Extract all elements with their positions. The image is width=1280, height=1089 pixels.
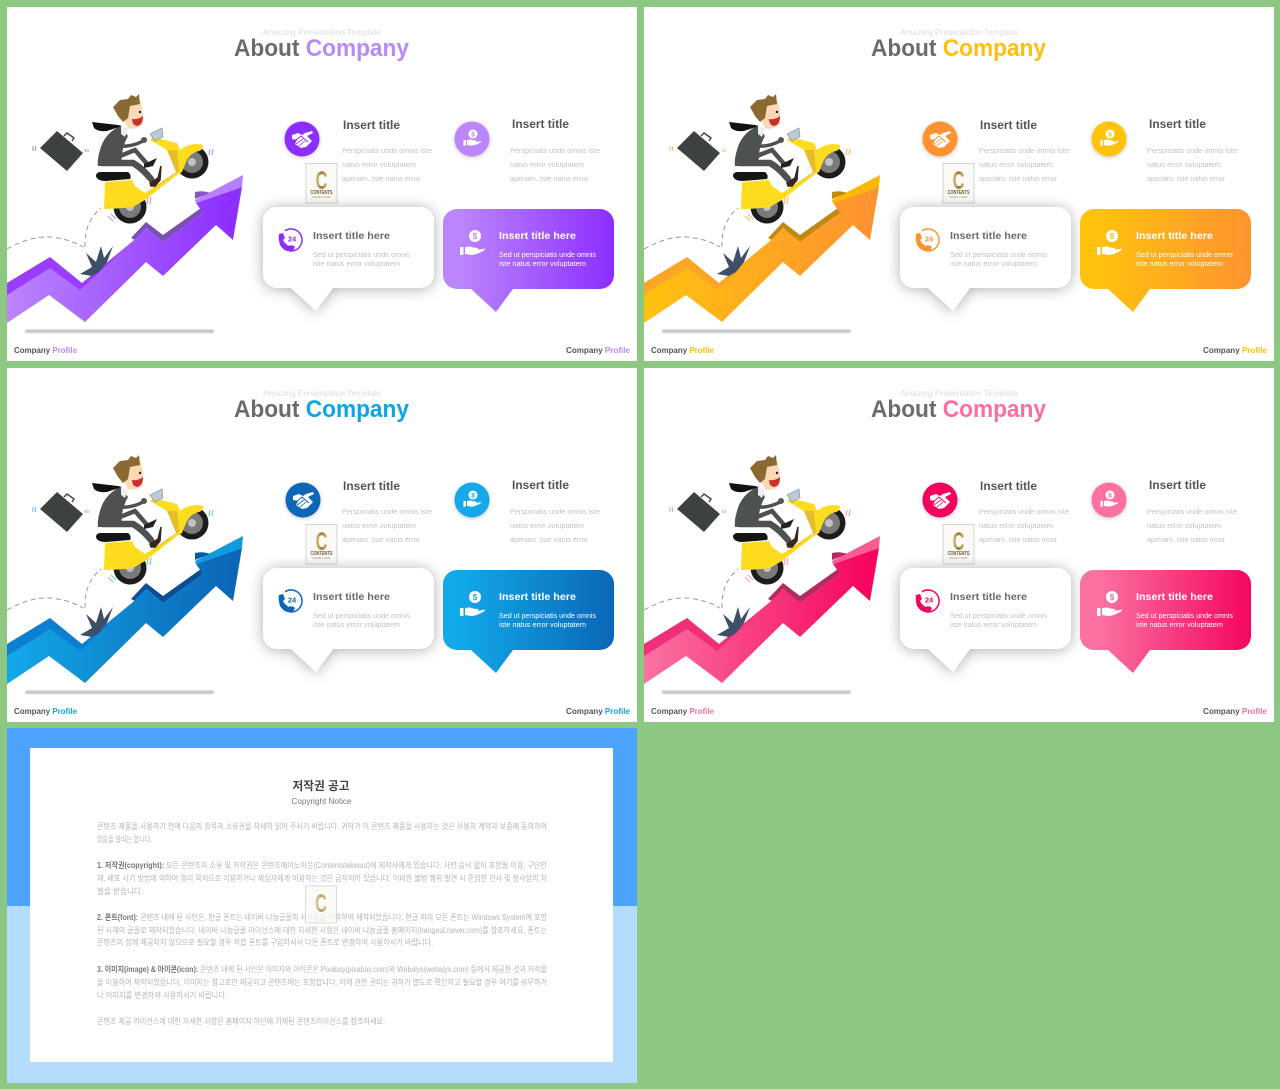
watermark stamp: MAKE YOUR — [950, 195, 968, 199]
illustration: businessman on scooter with briefcase — [670, 94, 850, 224]
panel: blue slide — [7, 368, 637, 722]
text block: left feature: natus error voluptatem — [979, 521, 1053, 530]
footer left: Company Profile — [14, 346, 78, 355]
watermark stamp: MAKE YOUR — [950, 556, 968, 560]
illustration: businessman on scooter with briefcase — [670, 455, 850, 584]
text block: right feature — [1147, 478, 1237, 544]
icon: handshake — [286, 482, 320, 518]
section 3: image and icon: 나 이미지를 변경하여 사용하시기 바랍니다. — [97, 990, 227, 1000]
text block: left feature: aperiam. Iste natus error — [979, 174, 1057, 183]
closing line: 콘텐츠 제공 라이선스에 대한 자세한 사항은 홈페이지 하단에 기재된 콘텐츠라이선스를 참조하세요. — [97, 1016, 385, 1026]
callout: white card — [900, 207, 1071, 311]
footer left: Company Profile — [651, 707, 715, 716]
icon: money hand: $ — [471, 492, 475, 500]
callout: white card: Sed ut perspiciatis unde omnis — [950, 252, 1047, 259]
panel: pink slide — [644, 368, 1274, 722]
text block: right feature: aperiam. Iste natus error — [510, 535, 588, 544]
section 1: copyright: 1. 저작권(copyright): 모든 콘텐츠의 소유 및 저작권은 콘텐츠메이노아웃(Contentstakeout)에 제작사에게 있습니다. 사전 승낙 없이 포함될 이용, 구단전 — [97, 860, 547, 870]
watermark stamp: C — [315, 890, 327, 918]
growth arrow — [644, 175, 880, 323]
callout: white card: iste natus error voluptatem — [313, 261, 400, 268]
callout: white card: 24 — [925, 234, 934, 244]
title: About Company — [871, 396, 1047, 423]
icon: money hand — [1092, 482, 1126, 518]
callout: gradient card: iste natus error voluptatem — [1136, 261, 1223, 268]
watermark stamp: MAKE YOUR — [313, 556, 331, 560]
text block: left feature: aperiam. Iste natus error — [342, 174, 420, 183]
illustration: businessman on scooter with briefcase — [33, 455, 213, 584]
callout: white card — [263, 207, 434, 311]
section 3: image and icon: 을 이용하여 제작되었습니다. 이미지는 참고로만 제공되고 콘텐츠에는 포함합니다. 이에 관한 권리는 귀하가 별도로 확인하고 필요할 경우 여기를 쉬무하거 — [97, 977, 547, 987]
icon: handshake — [922, 482, 958, 518]
title: About Company — [871, 35, 1047, 62]
text block: right feature: Perspiciatis unde omnis iste — [510, 507, 600, 516]
footer left: Company Profile — [651, 346, 715, 355]
section 3: image and icon — [97, 964, 547, 1000]
text block: left feature — [979, 118, 1069, 183]
text block: left feature: natus error voluptatem — [342, 521, 416, 530]
text block: right feature: Insert title — [512, 117, 569, 131]
callout: gradient card: Insert title here — [1136, 591, 1213, 603]
callout: white card: Insert title here — [313, 591, 390, 603]
text block: left feature: Perspiciatis unde omnis iste — [979, 146, 1069, 155]
title: About Company — [234, 396, 410, 423]
text block: left feature: aperiam. Iste natus error — [342, 535, 420, 544]
watermark stamp: C — [316, 528, 328, 556]
text block: right feature: aperiam. Iste natus error — [510, 174, 588, 183]
footer left: Company Profile — [14, 707, 78, 716]
text block: left feature — [979, 479, 1069, 544]
callout: gradient card: Sed ut perspiciatis unde omnis — [499, 613, 596, 620]
callout: white card: iste natus error voluptatem — [950, 622, 1037, 629]
callout: gradient card: Sed ut perspiciatis unde omnis — [1136, 613, 1233, 620]
callout: white card: Insert title here — [313, 230, 390, 242]
callout: gradient card: iste natus error voluptatem — [499, 261, 586, 268]
title: About Company — [234, 35, 410, 62]
ground shadow — [25, 690, 214, 694]
text block: left feature: Perspiciatis unde omnis iste — [979, 507, 1069, 516]
dashed jump path and crash mark — [644, 208, 750, 276]
panel: purple slide — [7, 7, 637, 361]
panel: orange slide — [644, 7, 1274, 361]
watermark stamp — [943, 524, 974, 564]
section 1: copyright — [97, 860, 547, 896]
callout: gradient card: $ — [1110, 232, 1115, 241]
text block: right feature: Insert title — [1149, 478, 1206, 492]
text block: right feature: natus error voluptatem — [510, 521, 584, 530]
copyright heading: 저작권 공고 — [292, 778, 350, 793]
watermark stamp: C — [952, 167, 964, 195]
text block: left feature: Insert title — [980, 118, 1037, 132]
callout: white card: Sed ut perspiciatis unde omnis — [950, 613, 1047, 620]
callout: gradient card — [443, 570, 614, 673]
footer right: Company Profile — [1203, 346, 1268, 355]
callout: gradient card — [443, 209, 614, 312]
intro paragraph: 콘텐츠 제품을 사용하기 전에 다음의 항목과 소유권을 자세히 읽어 주시기 바랍니다. 귀하가 이 콘텐츠 제품을 사용하는 것은 사용자 계약과 보증에 동의하여 — [97, 821, 547, 831]
callout: white card — [900, 568, 1071, 672]
subtitle: Amazing Presentation Template — [263, 27, 381, 37]
icon: money hand: $ — [1108, 132, 1112, 138]
icon: handshake — [284, 122, 320, 156]
copyright subheading: Copyright Notice — [292, 796, 352, 806]
text block: right feature: Insert title — [512, 478, 569, 492]
callout: gradient card: Sed ut perspiciatis unde omnis — [1136, 252, 1233, 259]
intro paragraph — [97, 821, 547, 844]
text block: left feature: Insert title — [980, 479, 1037, 493]
watermark stamp — [306, 164, 337, 203]
watermark stamp — [943, 164, 974, 203]
text block: right feature: natus error voluptatem — [1147, 521, 1221, 530]
growth arrow — [7, 536, 243, 684]
callout: gradient card: Insert title here — [499, 591, 576, 603]
footer right: Company Profile — [566, 707, 631, 716]
text block: left feature — [342, 479, 432, 544]
watermark stamp: CONTENTS — [310, 551, 333, 557]
ground shadow — [662, 690, 851, 694]
section 2: font — [97, 912, 548, 947]
text block: right feature — [510, 478, 600, 544]
dashed jump path and crash mark — [644, 569, 750, 637]
growth arrow — [7, 175, 243, 323]
text block: left feature: natus error voluptatem — [342, 160, 416, 169]
callout: gradient card: iste natus error voluptatem — [499, 622, 586, 629]
callout: gradient card: $ — [473, 593, 478, 602]
callout: white card: iste natus error voluptatem — [313, 622, 400, 629]
section 2: font: 콘텐츠의 함께 제공되지 않으므로 필요할 경우 적합 폰트를 구입하셔서 다른 폰트로 변경하여 사용하시기 바랍니다. — [97, 937, 433, 947]
intro paragraph: 있음을 알리는 합니다. — [97, 834, 152, 844]
text block: left feature: Perspiciatis unde omnis iste — [342, 146, 432, 155]
text block: left feature: Insert title — [343, 118, 400, 132]
icon: handshake — [922, 122, 958, 156]
text block: right feature: natus error voluptatem — [510, 160, 584, 169]
icon: money hand — [454, 482, 490, 518]
text block: right feature: Perspiciatis unde omnis iste — [1147, 507, 1237, 516]
dashed jump path and crash mark — [7, 569, 113, 637]
callout: gradient card: iste natus error voluptatem — [1136, 622, 1223, 629]
text block: left feature: Perspiciatis unde omnis iste — [342, 507, 432, 516]
ground shadow — [662, 330, 851, 333]
callout: gradient card: Insert title here — [1136, 230, 1213, 242]
callout: gradient card — [1080, 209, 1251, 312]
callout: white card: Sed ut perspiciatis unde omnis — [313, 252, 410, 259]
subtitle: Amazing Presentation Template — [263, 388, 381, 398]
text block: right feature — [510, 117, 600, 183]
icon: money hand — [454, 122, 490, 156]
callout: gradient card: Insert title here — [499, 230, 576, 242]
watermark stamp — [306, 886, 336, 923]
watermark stamp: C — [952, 528, 964, 556]
icon: money hand: $ — [471, 132, 475, 138]
section 1: copyright: 벌을 받습니다. — [97, 886, 143, 896]
watermark stamp: CONTENTS — [948, 551, 970, 557]
section 1: copyright: 재, 배포 사기 방법에 의하여 영리 목적으로 이용하거나 제삼자에게 이용하는 것은 금지되어 있습니다. 이러한 불법 행위 발견 시 준엄한 민사 및 형사상의 처 — [97, 873, 547, 883]
callout: white card: iste natus error voluptatem — [950, 261, 1037, 268]
callout: white card: Insert title here — [950, 591, 1027, 603]
callout: white card: 24 — [925, 596, 934, 604]
watermark stamp — [306, 524, 337, 564]
subtitle: Amazing Presentation Template — [900, 388, 1018, 398]
section 2: font: 2. 폰트(font): 콘텐츠 내에 된 사인은, 한글 폰트는 네이버 나눔글꼴의 서작물을 허락하여 제작되었습니다. 한글 외의 모든 폰트는 Windows System에 포함 — [97, 912, 548, 922]
section 2: font: 된 시체의 글꼴로 제작되었습니다. 네이버 나눔글꼴 라이선스에 대한 자세한 사항은 네이버 나눔글꼴 홈페이지(hangeul.naver.com)를 참조하세요. 폰트는 — [97, 925, 547, 935]
text block: right feature: Perspiciatis unde omnis iste — [1147, 146, 1237, 155]
callout: gradient card: $ — [473, 232, 478, 241]
text block: left feature — [342, 118, 432, 183]
footer right: Company Profile — [1203, 707, 1268, 716]
text block: right feature — [1147, 117, 1237, 183]
watermark stamp: CONTENTS — [948, 190, 970, 196]
watermark stamp: MAKE YOUR — [313, 195, 331, 199]
text block: right feature: Insert title — [1149, 117, 1206, 131]
watermark stamp: C — [316, 167, 328, 195]
text block: right feature: natus error voluptatem — [1147, 160, 1221, 169]
ground shadow — [25, 330, 214, 333]
section 3: image and icon: 3. 이미지(image) & 아이콘(icon): 콘텐츠 내에 된 사인은 이미지와 아이콘은 Pixabay(pixabay.com)와 Webalys(webalys.com) 등에서 제공한 것과 저작물 — [97, 964, 547, 974]
growth arrow — [644, 536, 880, 684]
icon: money hand — [1092, 122, 1126, 156]
dashed jump path and crash mark — [7, 208, 113, 276]
icon: money hand: $ — [1108, 492, 1112, 500]
text block: right feature: aperiam. Iste natus error — [1147, 535, 1225, 544]
callout: white card: Insert title here — [950, 230, 1027, 242]
callout: white card: Sed ut perspiciatis unde omnis — [313, 613, 410, 620]
callout: gradient card: Sed ut perspiciatis unde omnis — [499, 252, 596, 259]
callout: white card: 24 — [288, 234, 297, 244]
text block: right feature: Perspiciatis unde omnis iste — [510, 146, 600, 155]
text block: right feature: aperiam. Iste natus error — [1147, 174, 1225, 183]
callout: gradient card — [1080, 570, 1251, 673]
callout: gradient card: $ — [1110, 593, 1115, 602]
subtitle: Amazing Presentation Template — [900, 27, 1018, 37]
panel: copyright notice — [7, 728, 637, 1083]
watermark stamp: CONTENTS — [310, 190, 333, 196]
callout: white card: 24 — [288, 596, 297, 604]
text block: left feature: Insert title — [343, 479, 400, 493]
illustration: businessman on scooter with briefcase — [33, 94, 213, 224]
callout: white card — [263, 568, 434, 672]
text block: left feature: aperiam. Iste natus error — [979, 535, 1057, 544]
footer right: Company Profile — [566, 346, 631, 355]
text block: left feature: natus error voluptatem — [979, 160, 1053, 169]
